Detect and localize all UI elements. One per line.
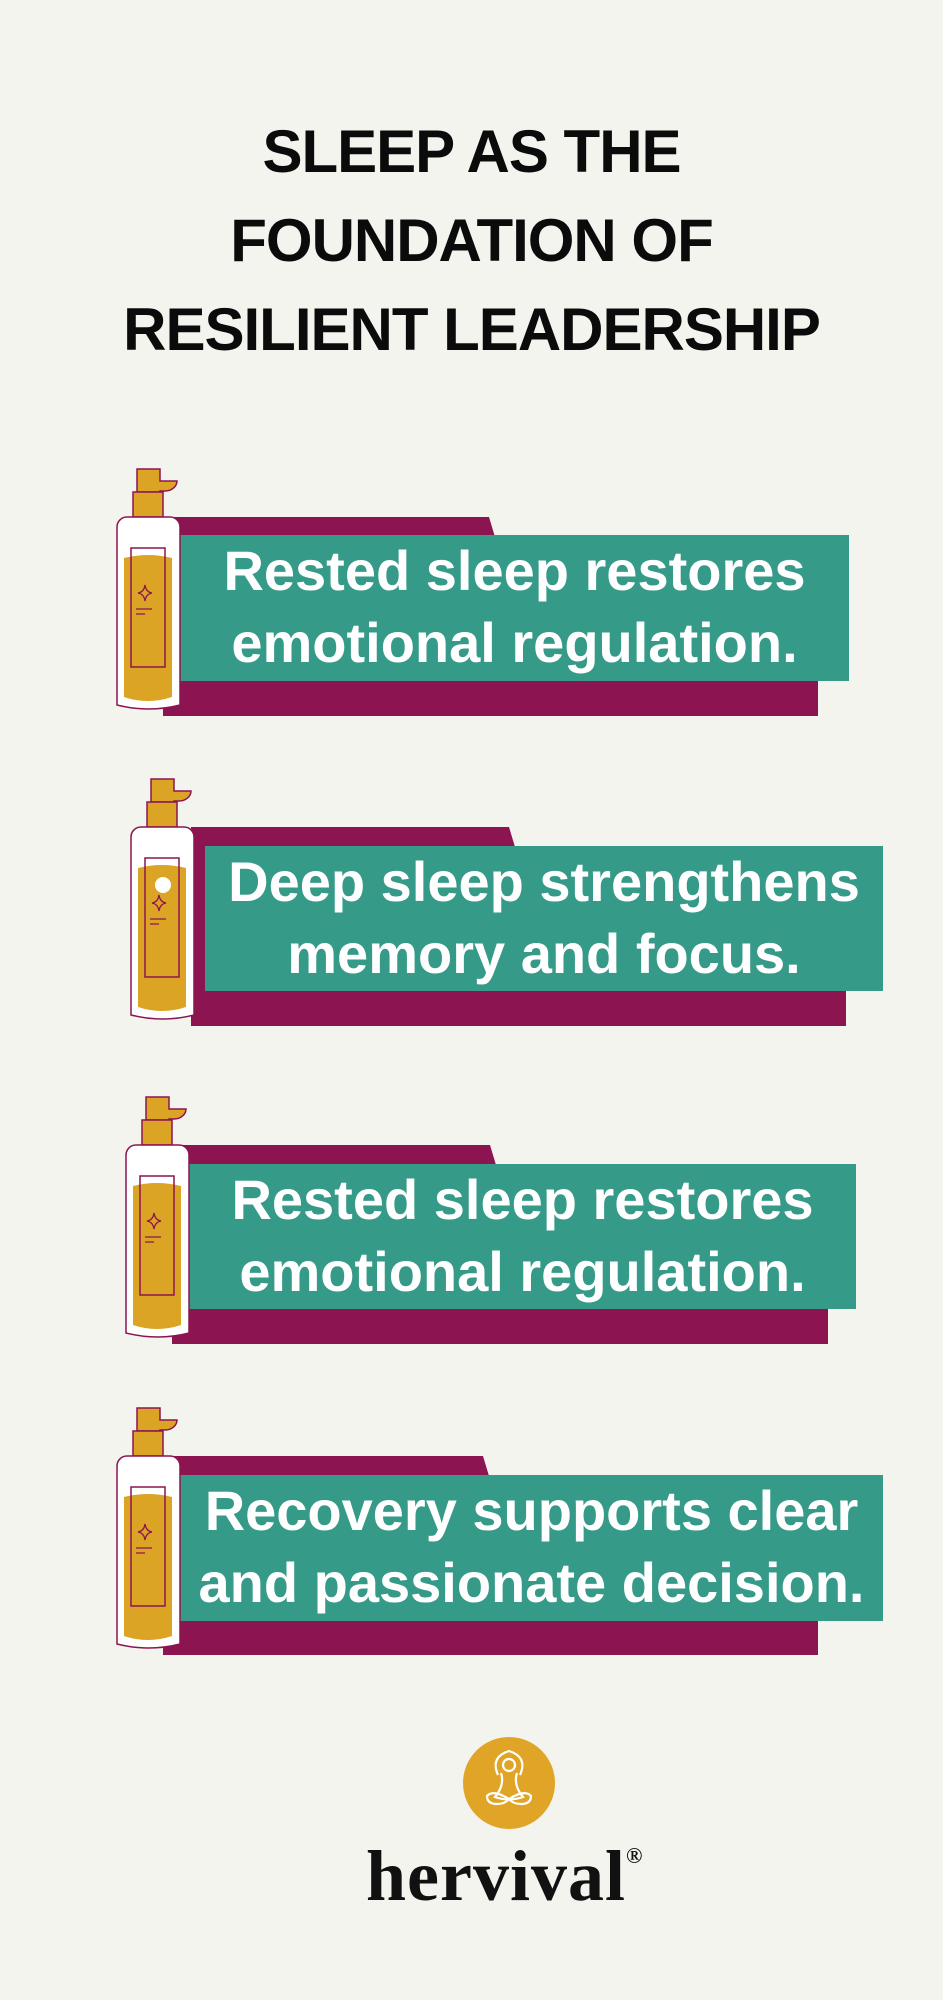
teal text box: emotional regulation. bbox=[231, 611, 798, 674]
teal text box bbox=[205, 846, 883, 991]
teal text box: and passionate decision. bbox=[199, 1551, 864, 1614]
panel: item 2 bbox=[130, 778, 883, 1026]
icon: bottle bbox=[125, 1096, 190, 1338]
icon: bottle bbox=[116, 1407, 181, 1649]
panel: item 4 bbox=[116, 1407, 883, 1655]
teal text box bbox=[189, 1164, 856, 1309]
teal text box: Deep sleep strengthens bbox=[228, 850, 860, 913]
magenta backing shape bbox=[163, 1456, 818, 1655]
magenta backing shape bbox=[191, 827, 846, 1026]
teal text box: Recovery supports clear bbox=[205, 1479, 858, 1542]
teal text box: memory and focus. bbox=[287, 922, 801, 985]
magenta backing shape bbox=[163, 517, 818, 716]
panel: item 3 bbox=[125, 1096, 856, 1344]
title: SLEEP AS THE bbox=[262, 118, 681, 185]
teal text box: emotional regulation. bbox=[239, 1240, 806, 1303]
title bbox=[123, 118, 820, 363]
teal text box bbox=[180, 1475, 883, 1621]
icon: bottle bbox=[116, 468, 181, 710]
title: RESILIENT LEADERSHIP bbox=[123, 296, 820, 363]
magenta backing shape bbox=[172, 1145, 828, 1344]
panel: item 1 bbox=[116, 468, 849, 716]
title: FOUNDATION OF bbox=[230, 207, 713, 274]
logo icon: meditation circle bbox=[463, 1737, 555, 1829]
teal text box: Rested sleep restores bbox=[223, 539, 806, 602]
icon: bottle bbox=[130, 778, 194, 1020]
logo wordmark: hervival® bbox=[366, 1836, 642, 1916]
teal text box bbox=[180, 535, 849, 681]
teal text box: Rested sleep restores bbox=[231, 1168, 814, 1231]
